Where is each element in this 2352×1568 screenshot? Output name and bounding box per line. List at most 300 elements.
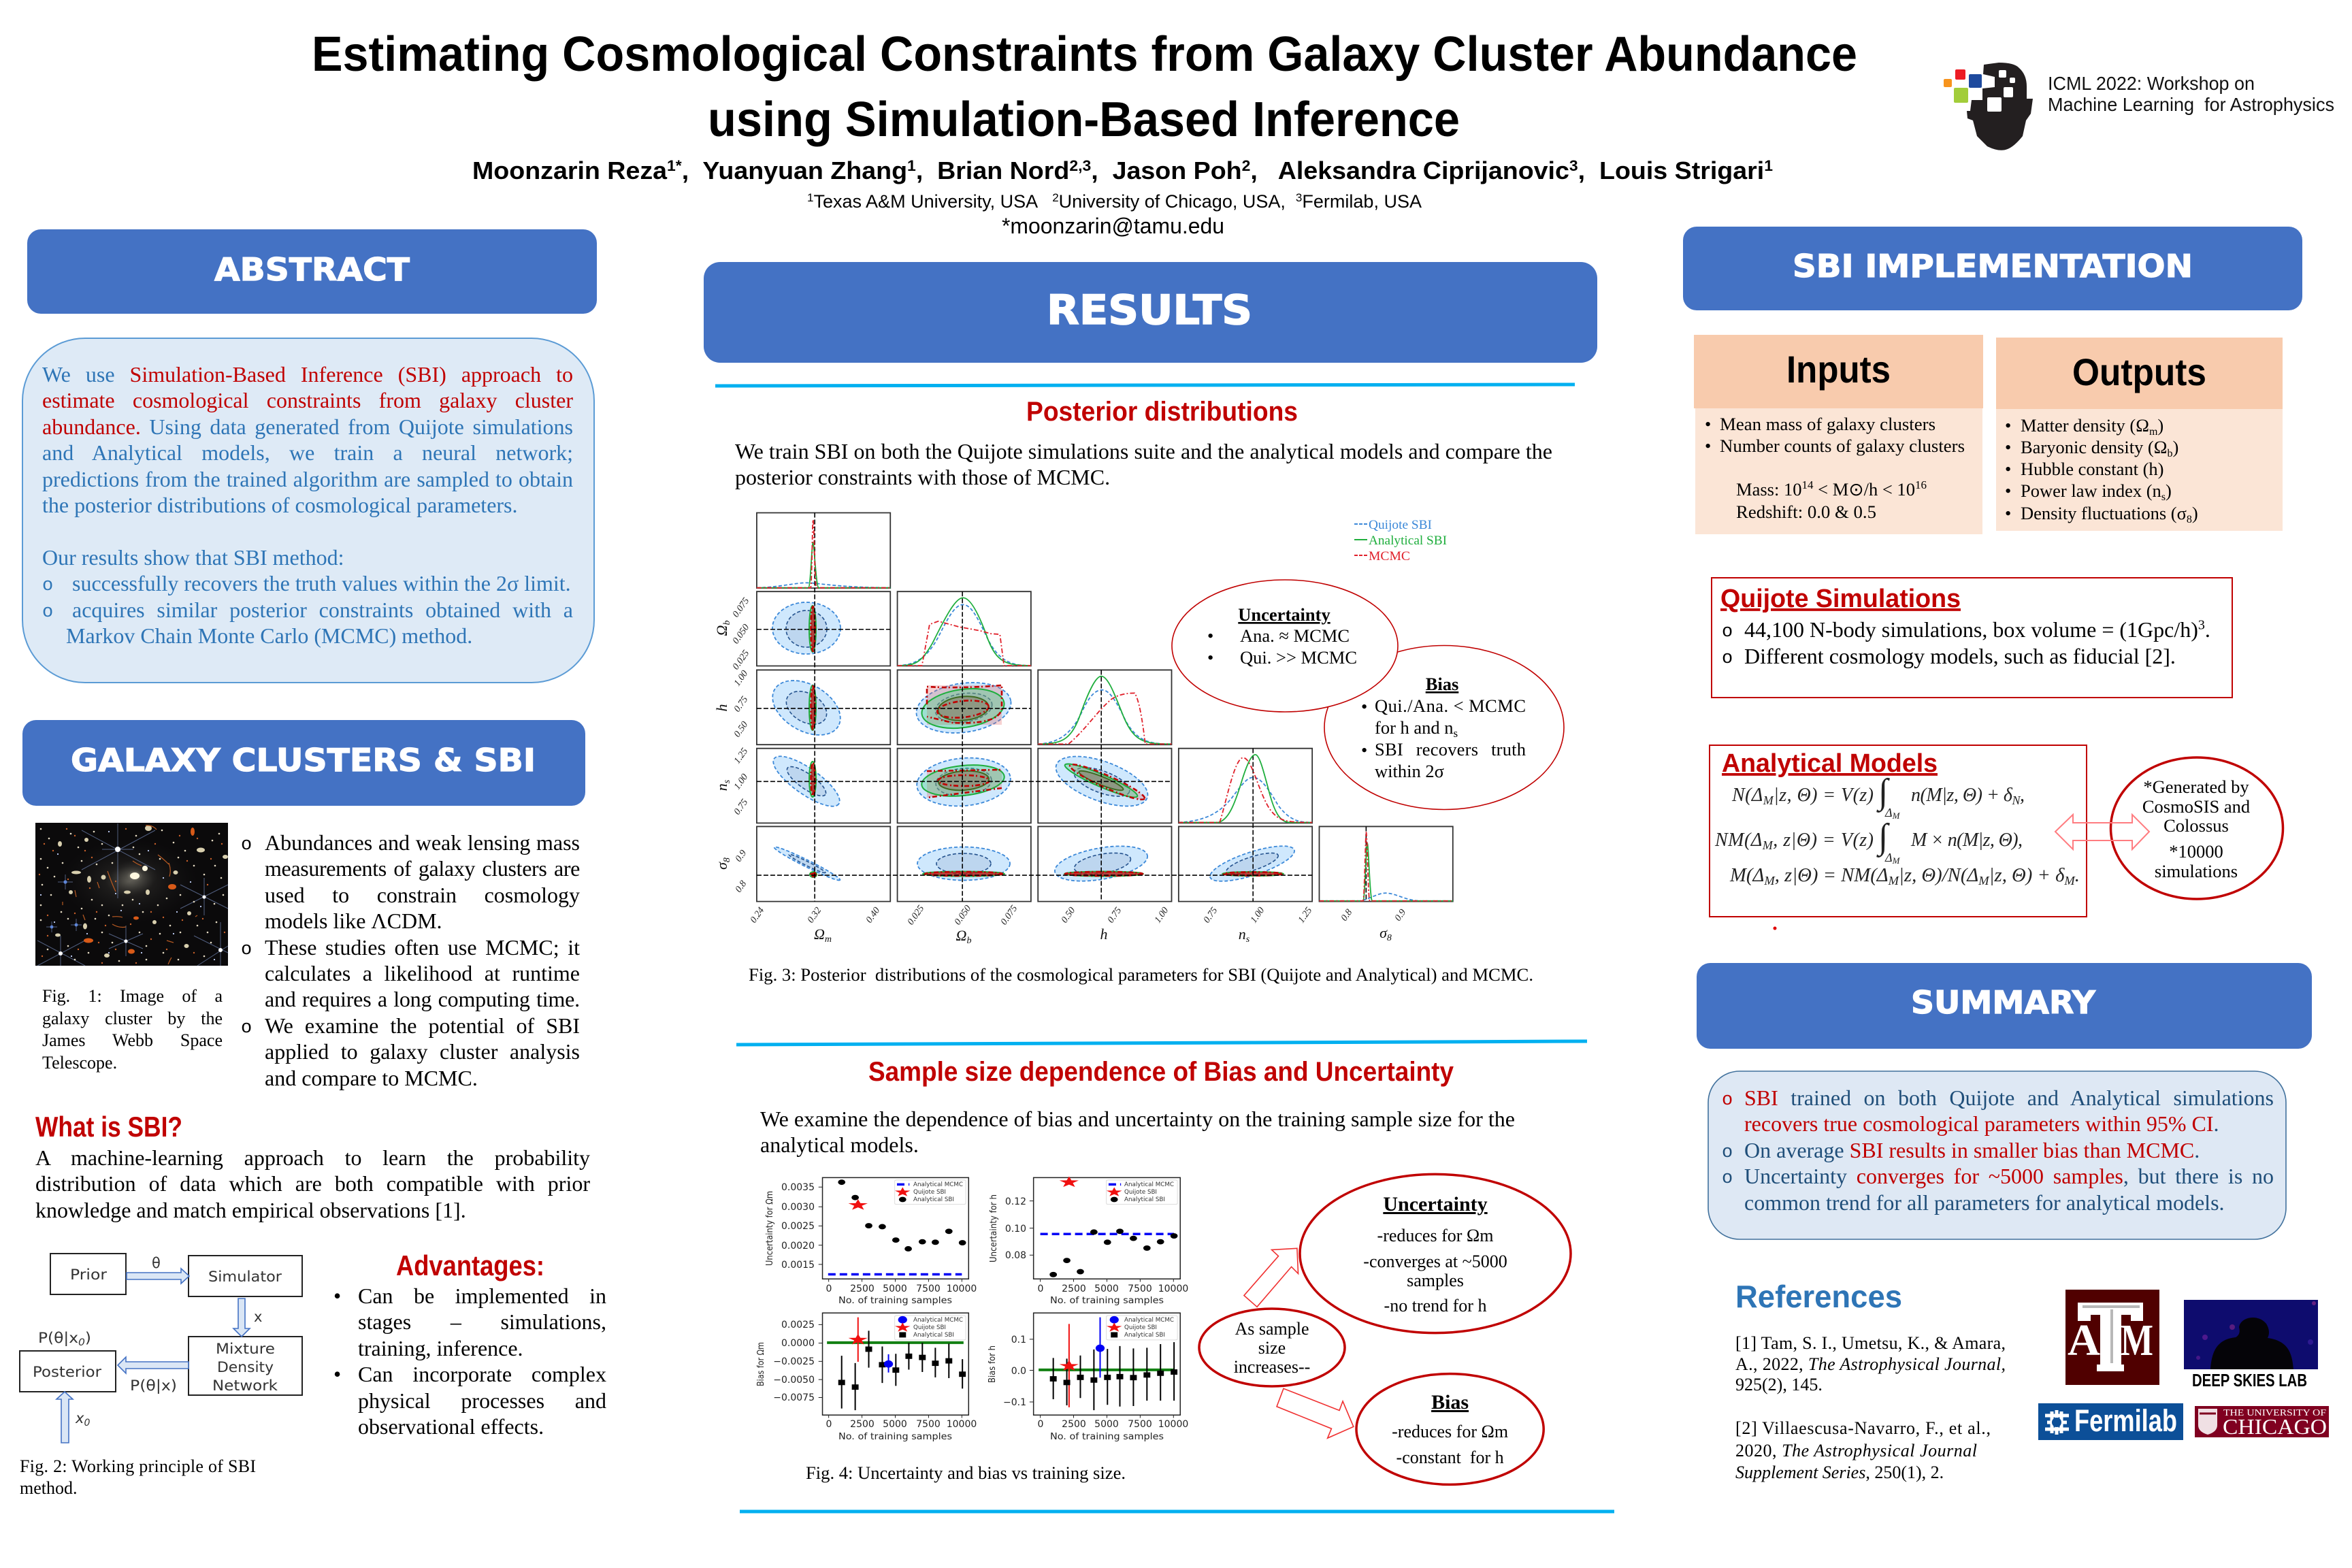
- text block: abstract: successfully recovers the truth values within the 2σ limit.: [72, 571, 571, 595]
- logo: Fermilab: [2038, 1403, 2183, 1440]
- equations: M: [1892, 855, 1901, 866]
- equations: , z|Θ) = NM(Δ: [1775, 865, 1889, 886]
- text block: summary: Uncertainty converges for ~5000 samples, but there is no: [1744, 1164, 2274, 1188]
- title: Estimating Cosmological Constraints from Galaxy Cluster Abundance: [312, 27, 1857, 82]
- chart labels: 0.0015: [781, 1260, 815, 1271]
- panel: outputs: b: [2167, 448, 2172, 459]
- panel: abstract background: [22, 338, 594, 683]
- references list: Supplement Series, 250(1), 2.: [1735, 1463, 1944, 1482]
- figure 2: SBI working principle diagram: 0: [78, 1337, 85, 1348]
- corner plot tick labels: 0.75: [1106, 906, 1124, 925]
- text: o: [241, 940, 252, 960]
- chart labels: 5000: [1094, 1419, 1119, 1430]
- chart labels: 0.0035: [781, 1182, 815, 1193]
- equations: M: [2063, 874, 2076, 887]
- text: o: [241, 1018, 252, 1039]
- chart labels: No. of training samples: [1050, 1432, 1164, 1442]
- figure 2: SBI working principle diagram: Mixture: [216, 1341, 275, 1357]
- figure 2: SBI working principle diagram: Network: [212, 1377, 278, 1394]
- text block: posterior intro: We train SBI on both the Quijote simulations suite and the analytical models and compare the: [735, 439, 1552, 463]
- corner plot tick labels: 1.00: [732, 669, 750, 688]
- panel: inputs: 14: [1802, 478, 1814, 491]
- callout: uncertainty: •: [1207, 625, 1213, 646]
- heading: advantages: Advantages:: [396, 1250, 544, 1281]
- chart labels: 2500: [1062, 1419, 1086, 1430]
- callout: as sample size increases: [1199, 1309, 1345, 1386]
- caption: figure 2: [20, 1456, 256, 1498]
- callout: bias: •: [1361, 696, 1367, 717]
- text block: galaxy clusters bullets: applied to galaxy cluster analysis: [265, 1039, 580, 1064]
- legend: corner plot: Analytical SBI: [1369, 534, 1447, 548]
- chart labels: No. of training samples: [838, 1432, 952, 1442]
- chart labels: 0: [1038, 1419, 1043, 1430]
- legend: corner plot: [1354, 518, 1447, 564]
- panel: inputs: Mass: 10: [1736, 479, 1801, 500]
- panel: results header: [704, 262, 1597, 363]
- chart frames: [823, 1177, 1180, 1415]
- chart labels: [756, 1181, 1188, 1442]
- equations: n(M|z, Θ) + δ: [1911, 785, 2012, 806]
- reference lines: [828, 1234, 1174, 1274]
- callout: bias: [1324, 645, 1564, 810]
- text block: abstract: Markov Chain Monte Carlo (MCMC) method.: [66, 623, 472, 648]
- references list: [1] Tam, S. I., Umetsu, K., & Amara,: [1735, 1333, 2006, 1353]
- references list: [1735, 1333, 2006, 1482]
- panel: summary background: [1708, 1071, 2286, 1239]
- text block: galaxy clusters bullets: We examine the potential of SBI: [265, 1013, 580, 1038]
- chart labels: Uncertainty for h: [989, 1194, 999, 1262]
- panel: summary header: SUMMARY: [1911, 984, 2096, 1021]
- equations: , z|Θ) = V(z): [1773, 830, 1874, 851]
- corner plot axis labels: s: [1246, 934, 1250, 945]
- corner plot axis labels: m: [825, 934, 832, 945]
- text: o: [1722, 1169, 1733, 1189]
- logo: University of Chicago: THE UNIVERSITY OF: [2223, 1408, 2326, 1418]
- equations: M: [1978, 874, 1990, 887]
- corner plot axis labels: Ω: [814, 926, 825, 943]
- figure 2: SBI working principle diagram: x: [254, 1309, 262, 1325]
- text block: galaxy clusters bullets: [241, 830, 580, 1090]
- callout: generated by: [2111, 757, 2283, 899]
- callout: generated by: simulations: [2155, 861, 2238, 881]
- panel: outputs: ): [2172, 437, 2178, 457]
- chart labels: −0.0075: [773, 1392, 815, 1403]
- text block: advantages: Can incorporate complex: [358, 1362, 606, 1386]
- galaxies: [55, 826, 228, 958]
- corner plot tick labels: 0.32: [806, 906, 823, 925]
- panel: SBI implementation header: SBI IMPLEMENTATION: [1793, 248, 2193, 284]
- chart labels: No. of training samples: [1050, 1296, 1164, 1306]
- text: o: [1722, 1143, 1733, 1163]
- corner plot tick labels: 0.40: [864, 906, 882, 925]
- legend: corner plot: MCMC: [1369, 549, 1410, 564]
- text block: advantages: Can be implemented in: [358, 1284, 606, 1308]
- panel: galaxy clusters header: [22, 720, 585, 806]
- authors: Moonzarin Reza: [472, 157, 659, 184]
- equations: M(Δ: [1730, 865, 1763, 886]
- corner plot tick labels: 0.050: [731, 623, 751, 646]
- corner plot axis labels: σ: [713, 862, 730, 870]
- figure 1: galaxy cluster image: [35, 823, 228, 966]
- caption: figure 1: galaxy cluster by the: [42, 1009, 223, 1028]
- equations: M × n(M|z, Θ),: [1910, 830, 2023, 851]
- corner plot tick labels: 0.050: [953, 904, 973, 927]
- chart labels: Analytical MCMC: [913, 1181, 963, 1188]
- chart labels: 0: [826, 1419, 832, 1430]
- corner plot tick labels: 0.75: [732, 798, 750, 817]
- heading: posterior distributions: Posterior distributions: [1026, 397, 1298, 427]
- chart labels: Analytical MCMC: [913, 1316, 963, 1323]
- panel: outputs: Power law index (n: [2021, 480, 2161, 501]
- arrow: double arrow: [2055, 815, 2149, 849]
- authors: 3: [1569, 157, 1578, 174]
- text: •: [333, 1284, 341, 1308]
- chart tick marks: [819, 1187, 1173, 1418]
- panel: outputs: [1996, 338, 2283, 531]
- chart labels: 2500: [1062, 1284, 1086, 1294]
- title: using Simulation-Based Inference: [708, 93, 1460, 147]
- affiliations: 3: [1296, 191, 1302, 204]
- equations: Δ: [1885, 851, 1893, 864]
- panel: inputs: Number counts of galaxy clusters: [1720, 436, 1965, 456]
- affiliations: Fermilab, USA: [1302, 191, 1422, 212]
- chart labels: Uncertainty for Ωm: [765, 1191, 775, 1266]
- callout: uncertainty: •: [1207, 647, 1213, 668]
- panel: inputs: Redshift: 0.0 & 0.5: [1736, 502, 1876, 522]
- logo: Texas A&M: M: [2121, 1316, 2153, 1365]
- text block: abstract: estimate cosmological constraints from galaxy cluster: [42, 388, 573, 412]
- text block: posterior intro: [735, 439, 1552, 489]
- text block: what is SBI: [35, 1145, 590, 1222]
- panel: outputs: ): [2157, 415, 2163, 436]
- panel: analytical models: [1710, 745, 2087, 917]
- text block: advantages: observational effects.: [358, 1414, 544, 1439]
- figure 2: SBI working principle diagram: Prior: [70, 1267, 107, 1283]
- panel: outputs: •: [2005, 480, 2011, 501]
- corner plot tick labels: 0.9: [1393, 908, 1408, 923]
- equations: Δ: [1885, 806, 1893, 819]
- text block: abstract: Our results show that SBI method:: [42, 545, 344, 570]
- figure 4: uncertainty and bias charts: [756, 1177, 1188, 1442]
- equations: ∫: [1876, 817, 1890, 858]
- panel: inputs: •: [1705, 414, 1711, 434]
- chart labels: Analytical SBI: [913, 1331, 954, 1338]
- chart labels: −0.0025: [773, 1356, 815, 1367]
- logo: Deep Skies Lab: DEEP SKIES LAB: [2192, 1370, 2307, 1390]
- text block: advantages: stages – simulations,: [358, 1309, 606, 1334]
- chart labels: Analytical SBI: [913, 1196, 954, 1203]
- text block: abstract: We use Simulation-Based Inference (SBI) approach to: [42, 362, 573, 387]
- chart labels: 7500: [916, 1284, 941, 1294]
- callout: bias: within 2σ: [1375, 761, 1444, 781]
- text block: galaxy clusters bullets: calculates a likelihood at runtime: [265, 961, 580, 985]
- references list: 2020, The Astrophysical Journal: [1735, 1441, 1977, 1460]
- text block: posterior intro: posterior constraints with those of MCMC.: [735, 465, 1110, 489]
- callout: bias vs sample size: Bias: [1431, 1391, 1469, 1414]
- callout: uncertainty vs sample size: [1300, 1174, 1571, 1333]
- chart labels: 5000: [883, 1419, 907, 1430]
- caption: figure 2: method.: [20, 1478, 78, 1498]
- text block: galaxy clusters bullets: used to constrain cosmology: [265, 883, 580, 907]
- text: o: [1722, 622, 1733, 642]
- text block: abstract: predictions from the trained algorithm are sampled to obtain: [42, 467, 573, 491]
- references list: 925(2), 145.: [1735, 1375, 1823, 1394]
- chart labels: 0.0: [1011, 1366, 1026, 1377]
- chart labels: 0.0025: [781, 1320, 815, 1330]
- chart labels: 5000: [1094, 1284, 1119, 1294]
- green contours: [809, 606, 1284, 877]
- chart labels: Quijote SBI: [913, 1324, 946, 1330]
- text block: summary: On average SBI results in smaller bias than MCMC.: [1744, 1138, 2200, 1162]
- chart labels: 0.10: [1005, 1224, 1026, 1235]
- chart labels: 10000: [947, 1419, 977, 1430]
- corner plot axis labels: Ω: [713, 625, 730, 636]
- text block: summary: common trend for all parameters for analytical models.: [1744, 1190, 2225, 1215]
- blue outer contours: [763, 602, 1298, 888]
- equations: ∫: [1876, 772, 1890, 813]
- corner plot axis labels: 8: [1387, 933, 1392, 943]
- equations: |z, Θ)/N(Δ: [1899, 865, 1978, 886]
- data points: [838, 1179, 1178, 1390]
- authors: 1*: [667, 157, 682, 174]
- corner plot axis labels: h: [1100, 926, 1108, 943]
- callout: as sample size increases: increases--: [1234, 1357, 1310, 1377]
- chart labels: 0: [1038, 1284, 1043, 1294]
- chart labels: 10000: [1158, 1419, 1188, 1430]
- equations: M: [1888, 874, 1899, 887]
- logo: University of Chicago: CHICAGO: [2223, 1414, 2327, 1439]
- panel: outputs: ): [2192, 503, 2198, 523]
- red filled regions: [927, 685, 1147, 804]
- workshop label: Machine Learning for Astrophysics: [2048, 94, 2334, 115]
- chart labels: 7500: [916, 1419, 941, 1430]
- text block: advantages: physical processes and: [358, 1388, 606, 1413]
- chart labels: Bias for Ωm: [756, 1342, 766, 1386]
- caption: figure 1: Fig. 1: Image of a: [42, 986, 223, 1006]
- affiliations: 2: [1052, 191, 1059, 204]
- affiliations: 1: [807, 191, 813, 204]
- caption: figure 4: Fig. 4: Uncertainty and bias vs training size.: [806, 1463, 1126, 1483]
- equations: |z, Θ) = V(z): [1774, 785, 1874, 806]
- background dots: [41, 829, 223, 961]
- callout: uncertainty: [1172, 580, 1398, 712]
- caption: figure 1: James Webb Space: [42, 1030, 223, 1050]
- callout: bias vs sample size: -reduces for Ωm: [1392, 1422, 1508, 1441]
- authors: , Yuanyuan Zhang: [682, 157, 907, 184]
- heading: sample size dependence: Sample size dependence of Bias and Uncertainty: [868, 1057, 1454, 1087]
- heading: what is SBI: What is SBI?: [35, 1111, 182, 1143]
- logo: University of Chicago: [2195, 1406, 2329, 1439]
- text block: sample size intro: We examine the dependence of bias and uncertainty on the training sample size for the: [760, 1107, 1515, 1131]
- stars: [849, 1177, 1122, 1371]
- text block: galaxy clusters bullets: models like ΛCDM.: [265, 909, 442, 933]
- references list: [2] Villaescusa-Navarro, F., et al.,: [1735, 1418, 1991, 1438]
- callout: uncertainty: Uncertainty: [1238, 604, 1330, 625]
- corner plot axis labels: b: [722, 621, 732, 625]
- corner plot axis labels: σ: [1379, 924, 1387, 941]
- references list: A., 2022, The Astrophysical Journal,: [1735, 1354, 2006, 1374]
- callout: as sample size increases: As sample: [1235, 1319, 1309, 1339]
- equations: ,: [2020, 785, 2025, 806]
- equations: NM(Δ: [1715, 830, 1762, 851]
- authors: , Brian Nord: [916, 157, 1069, 184]
- chart labels: No. of training samples: [838, 1296, 952, 1306]
- figure 2: SBI working principle diagram: Posterior: [33, 1364, 101, 1380]
- workshop label: [2048, 73, 2334, 115]
- text block: galaxy clusters bullets: measurements of galaxy clusters are: [265, 856, 580, 881]
- chart labels: 0.12: [1005, 1196, 1026, 1207]
- affiliations: Texas A&M University, USA: [813, 191, 1052, 212]
- panel: inputs: Mean mass of galaxy clusters: [1720, 414, 1936, 434]
- corner plot tick labels: 0.8: [734, 879, 749, 894]
- corner plot tick labels: 0.8: [1339, 908, 1354, 923]
- chart labels: 0.0000: [781, 1338, 815, 1349]
- callout: bias: Qui./Ana. < MCMC: [1375, 696, 1526, 716]
- chart labels: Analytical SBI: [1124, 1196, 1165, 1203]
- figure 2: SBI working principle diagram: Simulator: [208, 1269, 282, 1285]
- panel: inputs: Inputs: [1786, 348, 1891, 391]
- text block: summary: SBI trained on both Quijote and Analytical simulations: [1744, 1085, 2274, 1110]
- authors: 1: [907, 157, 916, 174]
- figure 2: SBI working principle diagram: 0: [84, 1418, 90, 1428]
- callout: generated by: *10000: [2169, 841, 2223, 862]
- figure 2: SBI working principle diagram: ): [85, 1330, 91, 1346]
- text block: sample size intro: analytical models.: [760, 1132, 919, 1157]
- equations: .: [2075, 865, 2080, 886]
- affiliations: University of Chicago, USA,: [1059, 191, 1296, 212]
- panel: results header: RESULTS: [1047, 287, 1252, 334]
- text block: quijote bullets: 44,100 N-body simulations, box volume = (1Gpc/h)3.: [1744, 617, 2210, 642]
- equations: M: [1763, 874, 1776, 887]
- corner plot axis labels: s: [722, 779, 732, 783]
- caption: figure 3: Fig. 3: Posterior distributions of the cosmological parameters for SBI (Quijote and Analytical) and MCMC.: [749, 964, 1533, 985]
- panel: outputs: s: [2161, 491, 2166, 503]
- corner plot axis labels: h: [713, 704, 730, 712]
- dark inner contours: [937, 694, 1125, 794]
- corner plot axis labels: 8: [722, 858, 732, 862]
- panel: outputs: •: [2005, 415, 2011, 436]
- logo: Deep Skies Lab: [2184, 1300, 2318, 1390]
- equations: N(Δ: [1732, 785, 1763, 806]
- caption: figure 2: Fig. 2: Working principle of SBI: [20, 1456, 256, 1476]
- equations: N: [2011, 794, 2021, 807]
- panel: outputs: •: [2005, 459, 2011, 479]
- chart labels: Quijote SBI: [1124, 1324, 1157, 1330]
- arrow: to uncertainty: [1244, 1248, 1298, 1307]
- text block: advantages: [333, 1284, 606, 1439]
- corner plot tick labels: 0.75: [732, 695, 750, 714]
- corner plot tick labels: 0.75: [1202, 906, 1220, 925]
- panel: outputs: ): [2166, 480, 2172, 501]
- corner plot frames: [757, 513, 1453, 902]
- callout: as sample size increases: size: [1258, 1338, 1286, 1358]
- callout: bias: s: [1454, 727, 1458, 740]
- figure 2: SBI working principle diagram: [20, 1254, 302, 1443]
- chart labels: Quijote SBI: [1124, 1188, 1157, 1195]
- callout: generated by: *Generated by: [2143, 777, 2249, 797]
- panel: outputs: •: [2005, 437, 2011, 457]
- callout: uncertainty vs sample size: -no trend for h: [1384, 1296, 1486, 1316]
- panel: outputs: 8: [2187, 514, 2192, 525]
- corner plot tick labels: 1.00: [1249, 906, 1267, 925]
- text block: abstract: [42, 362, 573, 648]
- text block: quijote bullets: Different cosmology models, such as fiducial [2].: [1744, 644, 2176, 668]
- error bars: [842, 1330, 1174, 1410]
- workshop label: ICML 2022: Workshop on: [2048, 73, 2255, 94]
- callout: uncertainty vs sample size: -converges at ~5000: [1363, 1252, 1507, 1271]
- panel: outputs: Density fluctuations (σ: [2021, 503, 2187, 523]
- corner plot tick labels: 0.025: [906, 904, 926, 927]
- chart labels: 7500: [1128, 1284, 1152, 1294]
- authors: 2: [1242, 157, 1250, 174]
- text block: abstract: and Analytical models, we train a neural network;: [42, 440, 573, 465]
- corner plot tick labels: 1.25: [732, 747, 750, 766]
- corner plot tick labels: 0.9: [734, 849, 749, 864]
- panel: outputs: •: [2005, 503, 2011, 523]
- text block: what is SBI: distribution of data which are both compatible with prior: [35, 1171, 590, 1196]
- text block: sample size intro: [760, 1107, 1515, 1157]
- panel: quijote simulations: Quijote Simulations: [1720, 585, 1961, 613]
- corner plot tick labels: 0.50: [732, 720, 750, 739]
- panel: summary header: [1697, 963, 2312, 1049]
- panel: abstract header: ABSTRACT: [214, 251, 410, 288]
- arrow: to bias: [1277, 1388, 1354, 1438]
- text block: galaxy clusters bullets: These studies often use MCMC; it: [265, 935, 580, 960]
- corner plot axis labels: [713, 621, 1392, 946]
- text block: galaxy clusters bullets: and compare to MCMC.: [265, 1066, 478, 1090]
- text block: advantages: training, inference.: [358, 1336, 523, 1360]
- panel: outputs: Matter density (Ω: [2021, 415, 2149, 436]
- callout: bias: •: [1361, 740, 1367, 760]
- panel: outputs: Baryonic density (Ω: [2021, 437, 2167, 457]
- callout: bias: for h and n: [1375, 717, 1454, 738]
- panel: galaxy clusters header: GALAXY CLUSTERS & SBI: [71, 742, 536, 779]
- authors: , Jason Poh: [1091, 157, 1242, 184]
- chart labels: 0: [826, 1284, 832, 1294]
- text block: summary: recovers true cosmological parameters within 95% CI.: [1744, 1111, 2219, 1136]
- figure 2: SBI working principle diagram: P(θ|x: [38, 1330, 74, 1346]
- chart labels: −0.1: [1003, 1397, 1026, 1408]
- icon: ICML logo: [1944, 63, 2033, 150]
- logo: Texas A&M: [2065, 1290, 2159, 1385]
- callout: uncertainty: Ana. ≈ MCMC: [1240, 625, 1350, 646]
- text block: abstract: o: [42, 602, 53, 623]
- chart labels: 2500: [850, 1419, 875, 1430]
- chart labels: 10000: [1158, 1284, 1188, 1294]
- text block: galaxy clusters bullets: and requires a long computing time.: [265, 987, 580, 1011]
- callout: bias vs sample size: [1356, 1374, 1544, 1484]
- chart labels: Quijote SBI: [913, 1188, 946, 1195]
- equations: |z, Θ) + δ: [1989, 865, 2065, 886]
- corner plot axis labels: b: [966, 936, 971, 946]
- chart labels: 0.0025: [781, 1221, 815, 1232]
- corner plot tick labels: 1.25: [1296, 906, 1314, 925]
- text block: abstract: acquires similar posterior constraints obtained with a: [72, 598, 573, 622]
- callout: uncertainty vs sample size: -reduces for Ωm: [1377, 1226, 1493, 1245]
- panel: analytical models: Analytical Models: [1722, 749, 1938, 778]
- figure 2: SBI working principle diagram: P(θ|x): [130, 1377, 177, 1394]
- chart labels: 0.1: [1011, 1335, 1026, 1345]
- equations: M: [1763, 794, 1774, 807]
- corner plot tick labels: 0.50: [1060, 906, 1077, 925]
- chart labels: Analytical MCMC: [1124, 1181, 1174, 1188]
- panel: quijote simulations: [1712, 578, 2232, 698]
- equations: M: [1892, 811, 1901, 821]
- corner plot tick labels: 1.00: [1153, 906, 1171, 925]
- chart labels: Bias for h: [987, 1345, 998, 1383]
- chart labels: Analytical SBI: [1124, 1331, 1165, 1338]
- corner plot axis labels: n: [1239, 926, 1246, 943]
